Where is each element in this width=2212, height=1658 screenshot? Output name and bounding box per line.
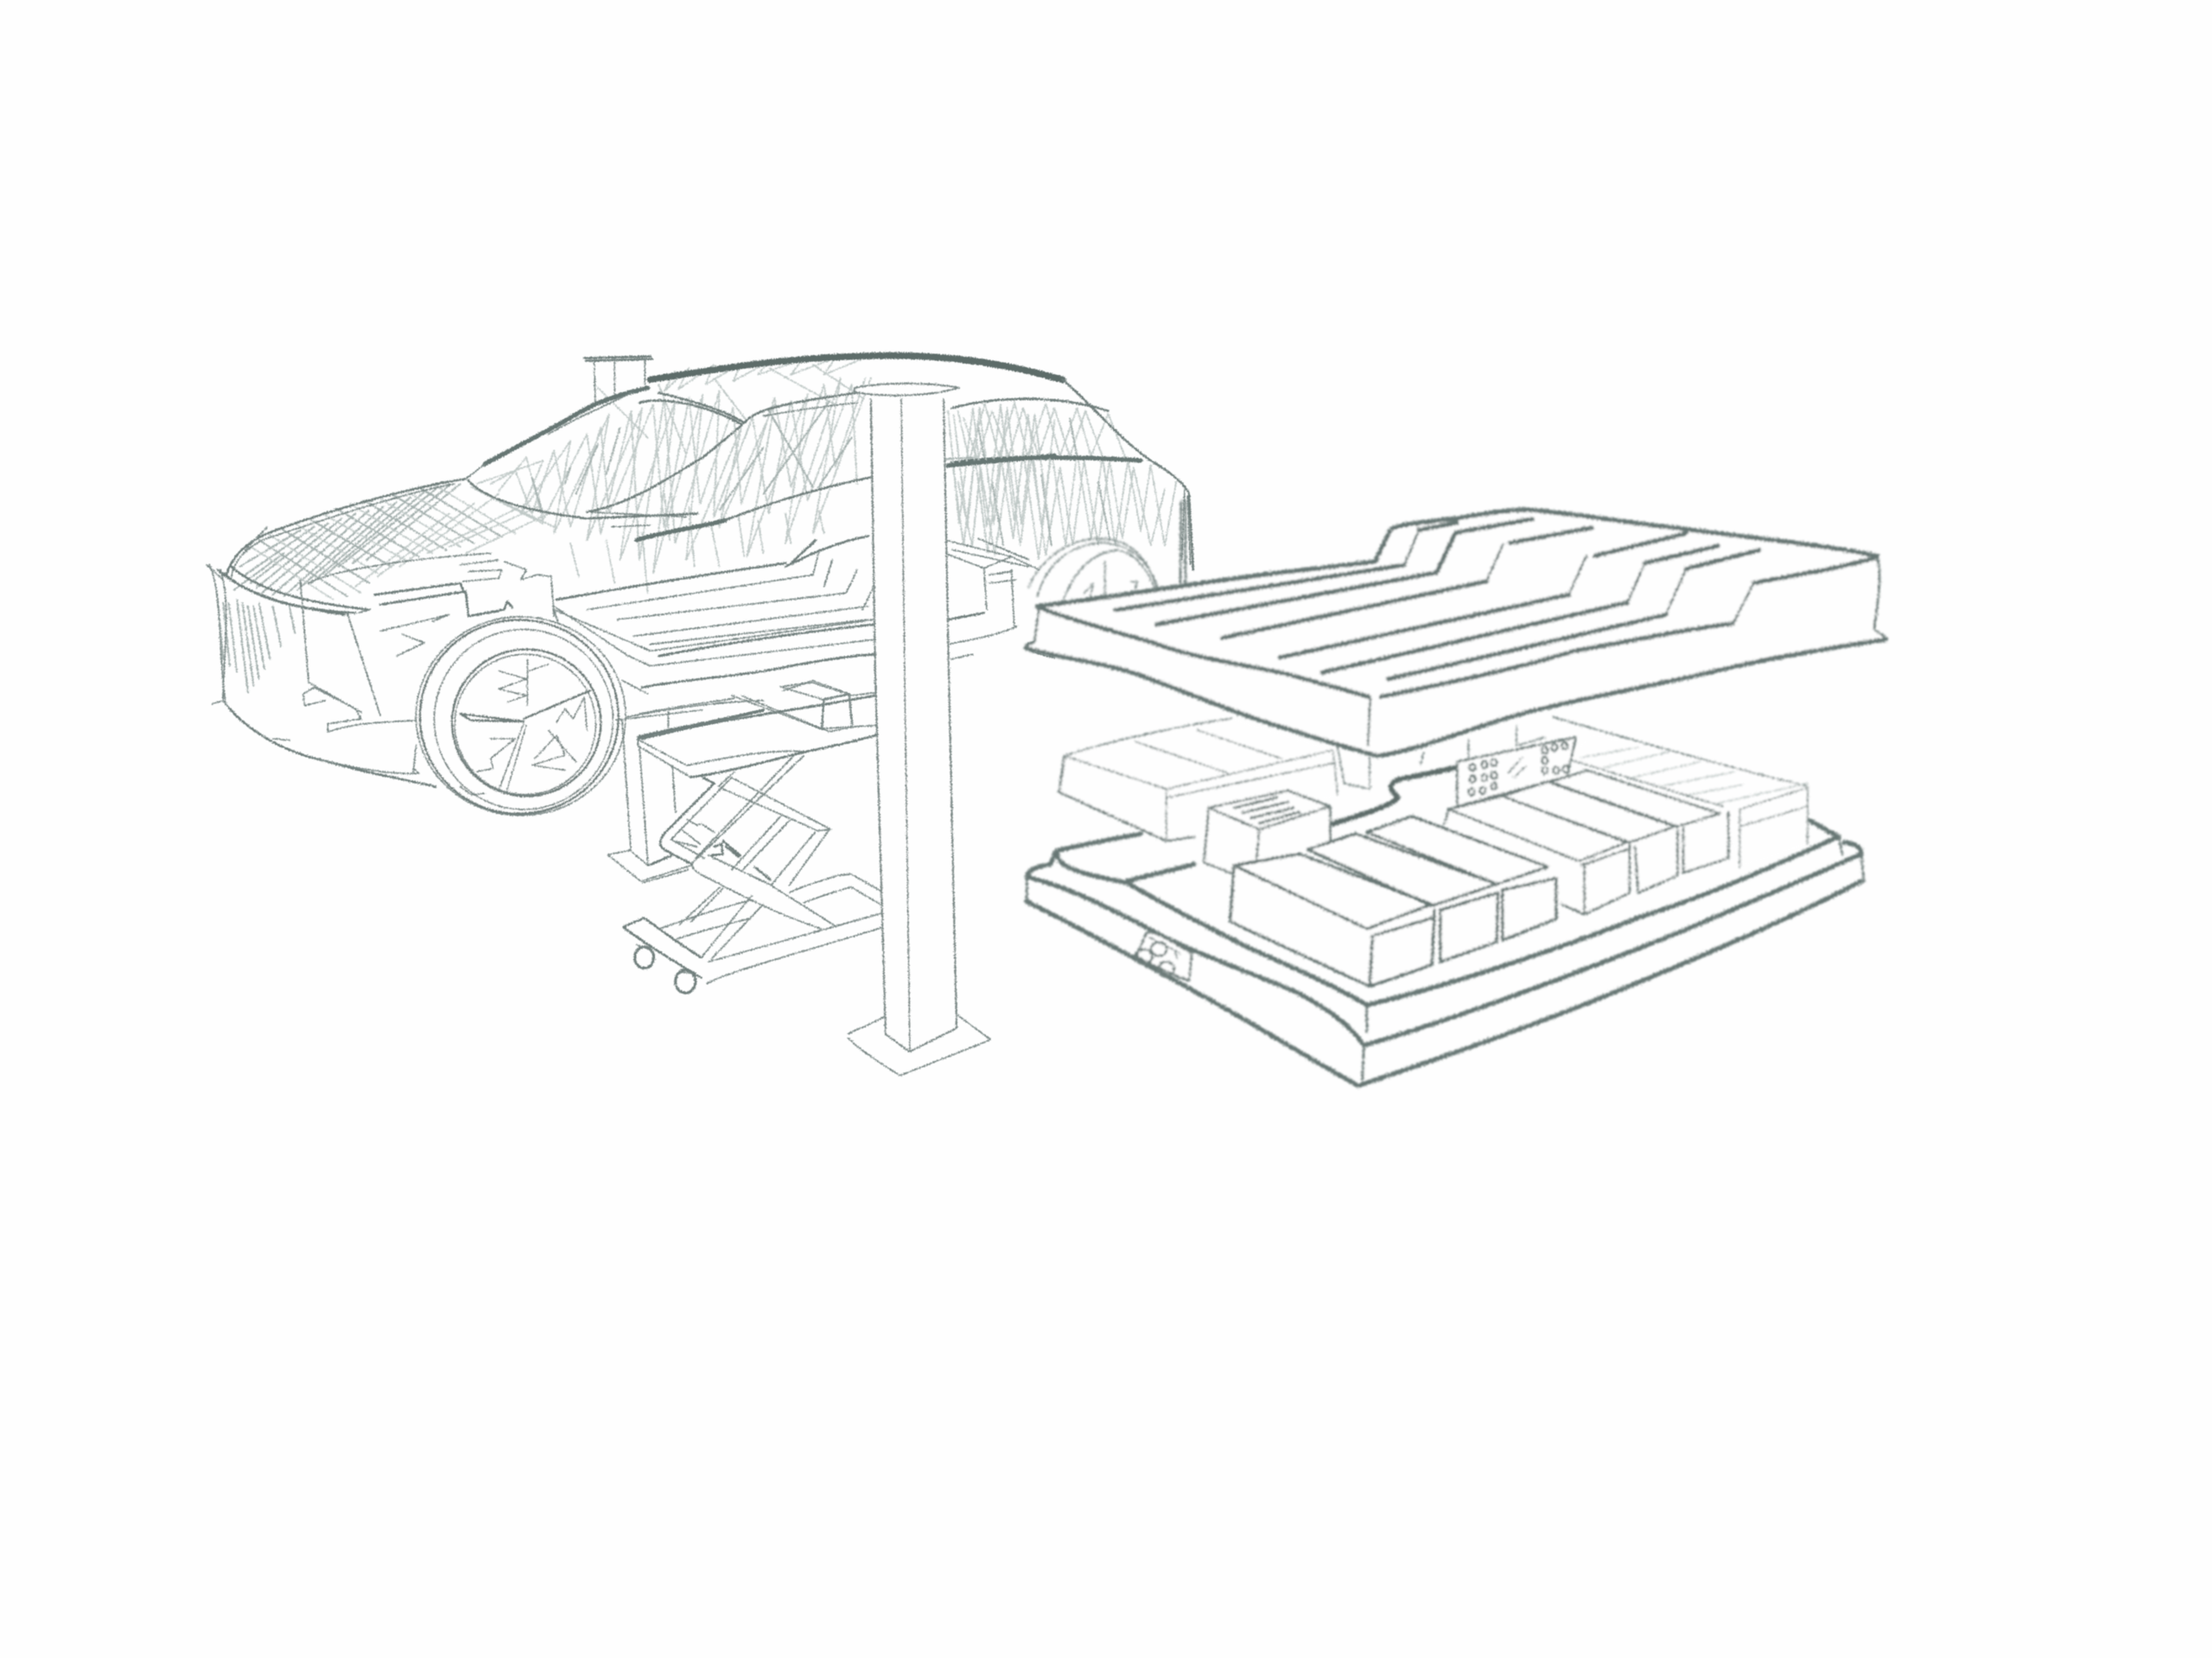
lift shelf xyxy=(638,696,875,739)
lift column behind shelf xyxy=(622,720,676,866)
pillar cap xyxy=(855,384,959,396)
battery lid xyxy=(1026,501,1887,756)
right of the pillar xyxy=(945,540,1012,610)
outline strokes xyxy=(651,355,1054,379)
control module with label xyxy=(1205,791,1330,874)
hood hatching xyxy=(234,484,461,596)
pillar edges xyxy=(871,399,957,1051)
lift base xyxy=(624,918,702,957)
battery in car xyxy=(556,563,785,600)
front pillar xyxy=(849,384,991,1076)
rear post behind car xyxy=(584,357,652,403)
car sketch xyxy=(207,355,1193,816)
cabin hatching xyxy=(477,378,871,573)
rear wheel behind lid xyxy=(1028,501,1185,607)
casters xyxy=(635,947,654,969)
control board xyxy=(1458,737,1576,806)
cable xyxy=(1333,767,1458,823)
lid outline and grooves xyxy=(1026,510,1887,756)
back right module xyxy=(1554,717,1808,867)
pillar base plate xyxy=(849,1015,991,1076)
battery base tray and modules xyxy=(1027,717,1864,1086)
scissor lift table xyxy=(607,683,883,993)
front wheel xyxy=(413,617,626,816)
back left module xyxy=(1059,719,1338,841)
car rear section xyxy=(879,356,1193,569)
car front, cabin and hood xyxy=(207,355,1054,816)
charging port xyxy=(1135,933,1192,981)
scissor arms xyxy=(660,778,715,864)
right module row xyxy=(1445,771,1728,914)
lid skirt lines behind xyxy=(1338,726,1545,789)
tray xyxy=(1027,819,1864,1086)
front module row xyxy=(1230,816,1556,987)
